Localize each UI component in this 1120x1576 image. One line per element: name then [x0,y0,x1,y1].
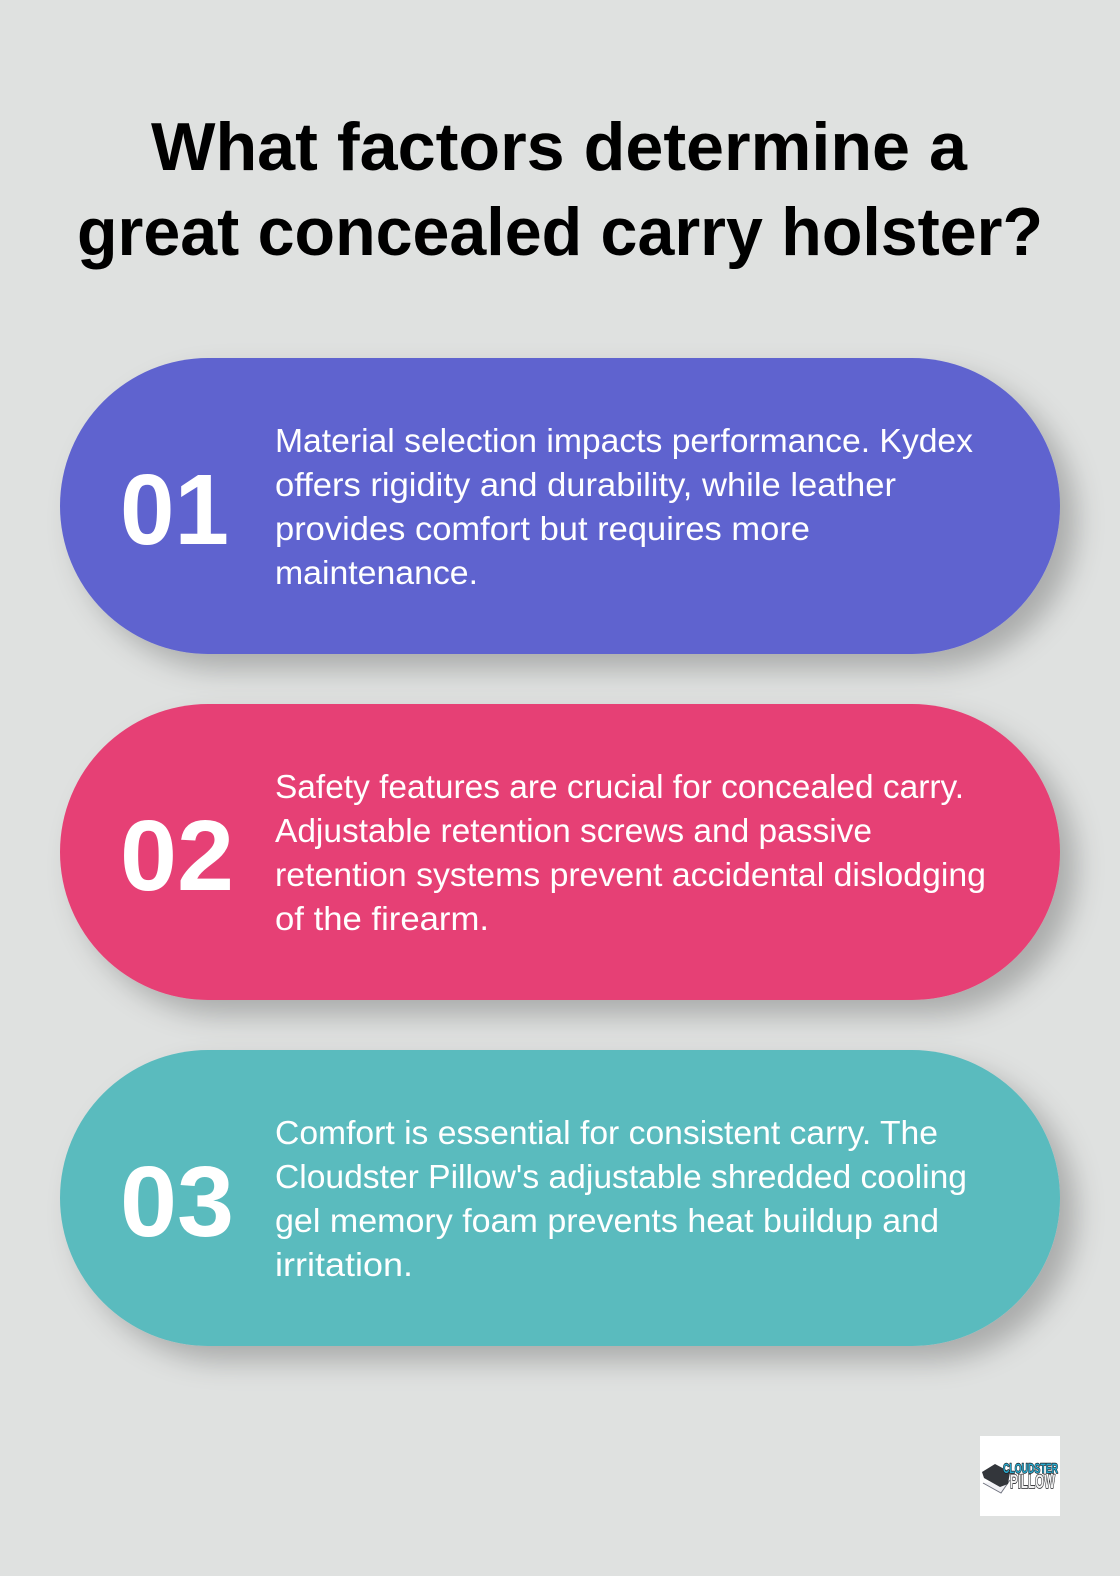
pill background [60,358,1060,654]
pill background [60,704,1060,1000]
description text: of the firearm. [275,900,489,937]
pill background [60,1050,1060,1346]
description text: Material selection impacts performance. Kydex [275,422,974,459]
number 03: 03 [120,1146,234,1258]
title: great concealed carry holster? [77,194,1043,270]
description text [275,768,986,937]
description text [275,422,974,591]
title: What factors determine a [151,109,968,185]
description text: provides comfort but requires more [275,510,810,547]
number 01: 01 [120,454,229,566]
description text: irritation. [275,1246,413,1283]
description text [275,1114,967,1283]
description text: Safety features are crucial for concealed carry. [275,768,964,805]
logo: Cloudster Pillow: PILLOW [1010,1472,1055,1493]
title [77,109,1043,270]
description text: maintenance. [275,554,478,591]
panel: factor 02 safety [60,704,1060,1000]
description text: offers rigidity and durability, while leather [275,466,896,503]
description text: Cloudster Pillow's adjustable shredded cooling [275,1158,967,1195]
number 02: 02 [120,800,234,912]
logo: Cloudster Pillow [980,1436,1060,1516]
description text: Adjustable retention screws and passive [275,812,872,849]
description text: Comfort is essential for consistent carry. The [275,1114,938,1151]
panel: factor 03 comfort [60,1050,1060,1346]
panel: factor 01 material [60,358,1060,654]
description text: gel memory foam prevents heat buildup and [275,1202,939,1239]
description text: retention systems prevent accidental dislodging [275,856,986,893]
logo: Cloudster Pillow: CLOUDSTER [1003,1460,1058,1476]
